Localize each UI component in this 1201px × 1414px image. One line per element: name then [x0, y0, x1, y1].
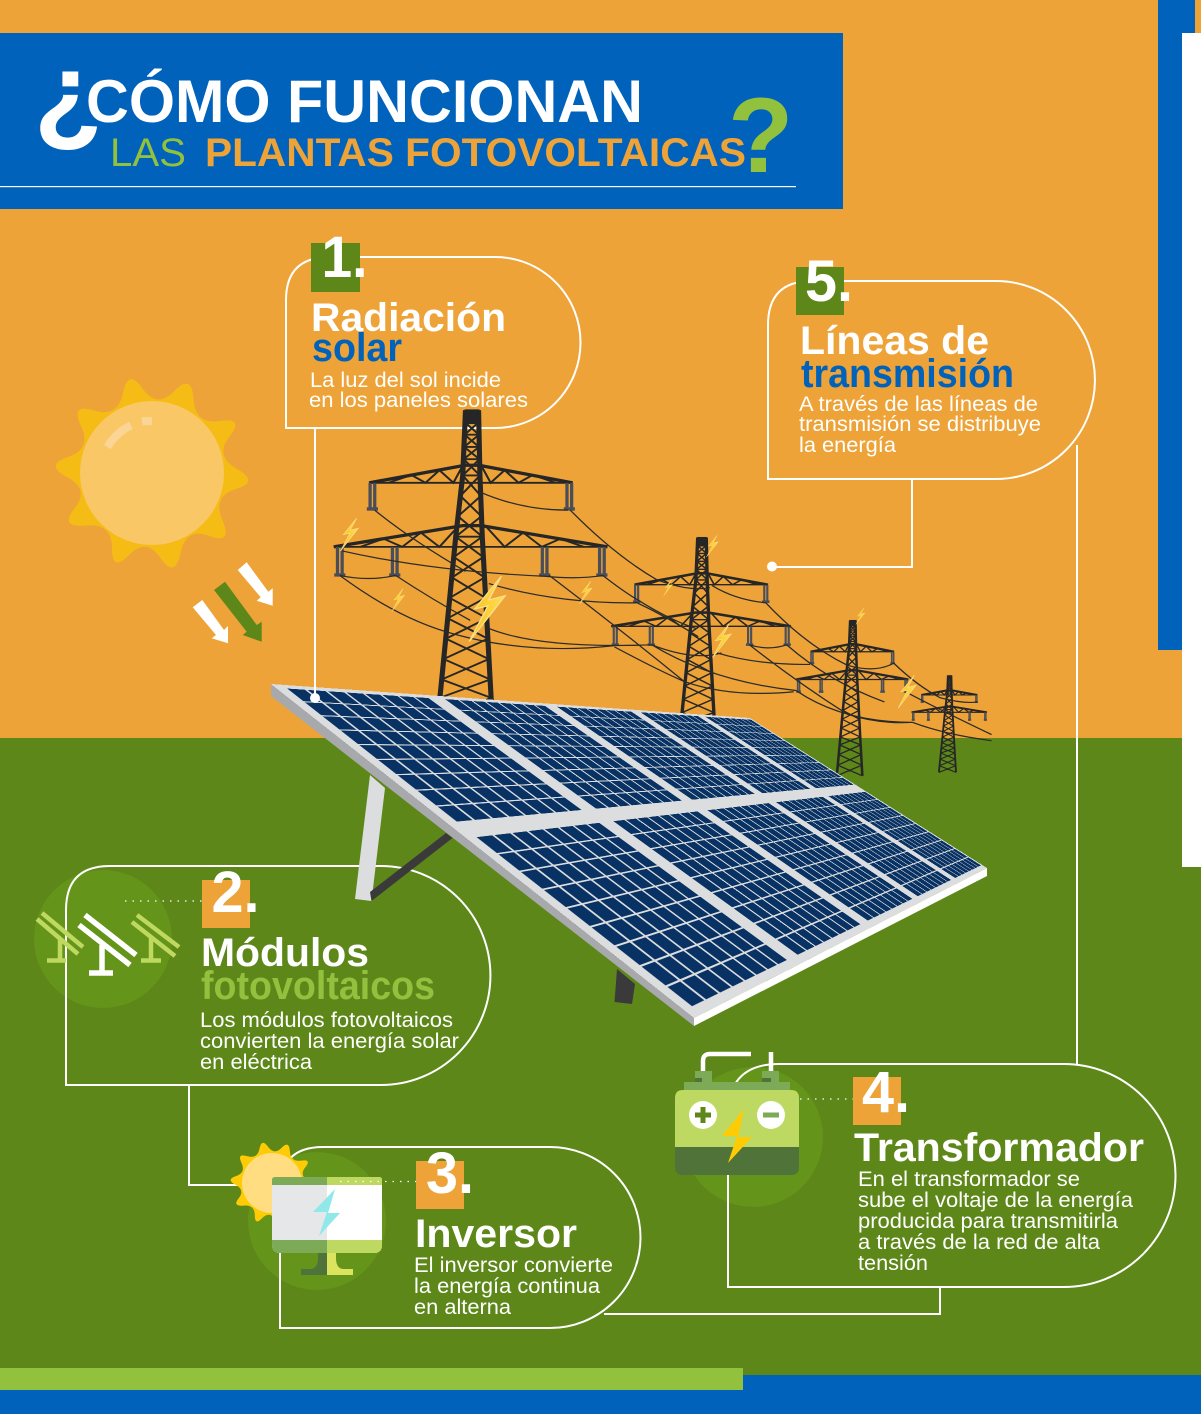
callout text 1: Radiación: [311, 296, 506, 340]
tower 4: [912, 675, 987, 772]
arrows: solar radiation: [193, 562, 273, 643]
icon: inverter monitor: [272, 1177, 382, 1275]
callout text 3: la energía continua: [414, 1274, 600, 1298]
callout text 5: 5.: [805, 249, 853, 314]
closing question mark: ?: [728, 75, 793, 195]
callout text 4: [854, 1060, 1144, 1275]
tower 3: [796, 620, 908, 776]
callout outline 4: [728, 1064, 1176, 1287]
title line 2 bold: PLANTAS FOTOVOLTAICAS: [205, 131, 746, 175]
callout text 2: convierten la energía solar: [200, 1029, 459, 1053]
callout text 3: El inversor convierte: [414, 1253, 613, 1277]
icon: sun: [56, 379, 248, 567]
callout text 2: fotovoltaicos: [201, 964, 435, 1008]
connector 5 to 4: [1076, 445, 1078, 1064]
icon circle: transformer: [683, 1067, 823, 1207]
green ground: [0, 738, 1201, 1414]
number 5 square: [796, 267, 844, 315]
dotted line 3: [340, 1180, 420, 1182]
icon circle: inverter: [248, 1152, 386, 1290]
callout text 3: 3.: [426, 1141, 474, 1206]
connector 1 to panel: [310, 428, 320, 703]
dot: transmission connector: [767, 562, 777, 572]
tower 1: [334, 409, 607, 769]
title underline: [0, 186, 796, 187]
callout text 4: Transformador: [854, 1126, 1144, 1170]
callout text 4: a través de la red de alta: [858, 1230, 1100, 1254]
callout text 2: [200, 860, 459, 1074]
callout text 1: solar: [312, 326, 402, 370]
icon: battery transformer: [675, 1052, 799, 1175]
callout text 2: en eléctrica: [200, 1050, 312, 1074]
opening question mark: ¿: [34, 30, 102, 155]
title line 1: CÓMO FUNCIONAN: [86, 68, 643, 135]
dotted line 2: [125, 900, 212, 902]
callout outline 2: [66, 866, 490, 1085]
callout text 1: La luz del sol incide: [310, 368, 501, 392]
callout text 3: Inversor: [415, 1212, 577, 1256]
icon: inverter sun: [231, 1143, 313, 1224]
callout text 5: transmisión: [801, 352, 1014, 396]
connector 5 to towers: [772, 479, 912, 567]
tower 2: [611, 537, 791, 771]
panel legs: [355, 775, 635, 1004]
callout text 5: [799, 249, 1041, 457]
number 1 square: [311, 243, 360, 292]
callout text 2: Módulos: [201, 931, 369, 975]
dotted line 4: [800, 1098, 856, 1100]
bottom lime band: [0, 1368, 743, 1390]
top right blue bar: [1158, 0, 1195, 650]
icon: solar modules: [37, 913, 179, 973]
callout text 4: tensión: [858, 1251, 928, 1275]
number 2 square: [202, 880, 250, 928]
panel thickness edges: [271, 684, 987, 1026]
callout text 5: Líneas de: [800, 319, 989, 363]
callout text 4: 4.: [862, 1060, 910, 1125]
callout text 1: [309, 225, 528, 412]
number 3 square: [416, 1161, 464, 1209]
lightning bolts: [341, 518, 916, 708]
callout text 5: transmisión se distribuye: [799, 412, 1041, 436]
connector 3 to 4: [604, 1287, 940, 1314]
callout text 5: A través de las líneas de: [799, 392, 1038, 416]
power cables: [340, 492, 992, 741]
connector 2 to 3: [189, 1085, 245, 1185]
solar panel surface: [271, 684, 987, 1018]
callout outline 1: [286, 257, 580, 428]
icon circle: modules: [34, 870, 172, 1008]
callout text 2: 2.: [212, 860, 260, 925]
number 4 square: [853, 1077, 901, 1125]
callout text 3: en alterna: [414, 1295, 511, 1319]
callout text 4: En el transformador se: [858, 1167, 1080, 1191]
callout text 4: producida para transmitirla: [858, 1209, 1118, 1233]
title banner: [0, 30, 843, 209]
bottom blue band: [0, 1375, 1201, 1414]
right white strip: [1182, 33, 1201, 867]
callout text 2: Los módulos fotovoltaicos: [200, 1008, 453, 1032]
callout text 3: [414, 1141, 613, 1319]
callout outline 5: [768, 281, 1095, 479]
title line 2: LAS: [110, 131, 186, 175]
callout outline 3: [280, 1147, 640, 1328]
callout text 5: la energía: [799, 433, 896, 457]
callout text 1: 1.: [322, 225, 368, 290]
callout text 4: sube el voltaje de la energía: [858, 1188, 1133, 1212]
transmission towers: [334, 409, 992, 776]
callout text 1: en los paneles solares: [309, 388, 528, 412]
